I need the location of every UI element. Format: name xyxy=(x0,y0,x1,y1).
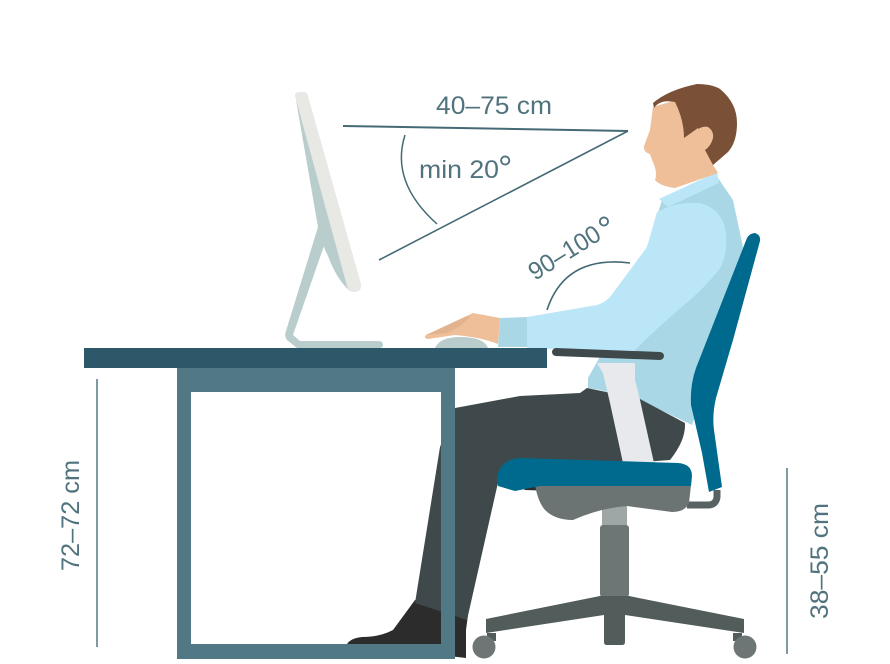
icon: monitor xyxy=(285,92,383,348)
angle label: elbow xyxy=(523,208,630,310)
icon: mouse xyxy=(435,337,488,348)
label: viewing angle xyxy=(419,148,512,188)
chair armrest xyxy=(556,352,660,463)
label: viewing distance: 40–75 cm xyxy=(436,92,552,120)
figure: hand xyxy=(425,313,500,344)
figure: shoe xyxy=(347,600,470,658)
figure: head xyxy=(644,84,737,188)
chair seat xyxy=(497,458,717,525)
table xyxy=(84,348,547,659)
angle label: elbow: ° xyxy=(597,208,611,250)
figure: torso and arm xyxy=(498,172,743,425)
chair base xyxy=(472,525,756,658)
angle label: elbow: 90–100 xyxy=(523,220,606,286)
desk height measure: 72–72 cm xyxy=(57,460,85,571)
label: viewing angle: ° xyxy=(498,148,512,188)
label: viewing angle: min 20 xyxy=(419,156,499,184)
chair back xyxy=(691,233,760,492)
seat height measure: 38–55 cm xyxy=(806,503,834,619)
viewing distance lines xyxy=(343,126,628,260)
figure: trousers xyxy=(415,388,685,620)
